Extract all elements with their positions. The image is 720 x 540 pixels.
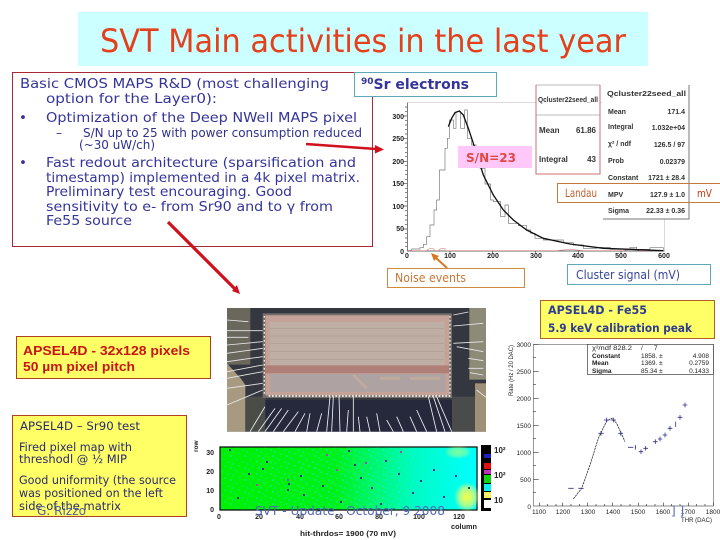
stats box: signal fit: 126.5 / 97 — [654, 142, 685, 149]
label: Landau — [558, 184, 720, 202]
stats box: noise: Qcluster22seed_all — [538, 97, 598, 104]
chart: Fe55 threshold scan: / — [641, 345, 643, 352]
chart: cluster signal histogram: 200 — [392, 159, 404, 166]
chart: Fe55 threshold scan: 0 — [527, 504, 531, 511]
chart: fired pixel map: 80 — [375, 514, 383, 521]
stats box: noise: 61.86 — [576, 126, 597, 135]
chart: fired pixel map: 100 — [413, 514, 425, 521]
panel: activities summary: • — [19, 110, 27, 126]
chart: cluster signal histogram: 100 — [392, 204, 404, 211]
panel: activities summary: Basic CMOS MAPS R&D (most challenging — [20, 76, 329, 92]
label: 90Sr electrons — [354, 72, 496, 96]
title banner — [78, 12, 648, 66]
label: APSEL4D pixels: 50 µm pixel pitch — [23, 359, 135, 374]
chart: Fe55 threshold scan: 500 — [520, 477, 531, 484]
chart: fired pixel map: 0 — [210, 507, 214, 514]
chart: Fe55 threshold scan: 1500 — [517, 423, 531, 430]
label: noise events — [388, 268, 524, 288]
chart: cluster signal histogram: 200 — [487, 253, 499, 260]
chart: cluster signal histogram: 300 — [530, 253, 542, 260]
chart: Fe55 threshold scan: Rate (Hz / 20 DAC) — [508, 345, 515, 396]
chart: Fe55 threshold scan: 4.908 — [693, 353, 709, 360]
panel: Sr90 test notes: APSEL4D – Sr90 test — [20, 419, 140, 433]
chart: cluster signal histogram: 400 — [572, 253, 584, 260]
arrow: summary to histogram — [306, 144, 384, 154]
panel: activities summary: Optimization of the Deep NWell MAPS pixel — [46, 110, 357, 126]
panel: activities summary — [12, 72, 372, 246]
label: cluster signal axis — [568, 264, 710, 284]
stats box: signal fit: Integral — [608, 124, 633, 131]
chart: fired pixel map: hit-thrdos= 1900 (70 mV) — [300, 531, 396, 538]
chart: cluster signal histogram: 500 — [615, 253, 627, 260]
chart: Fe55 threshold scan: 85.34 ± — [641, 368, 663, 375]
stats box: signal fit: 171.4 — [667, 109, 685, 116]
stats box: signal fit: Qcluster22seed_all — [607, 89, 686, 98]
chart: fired pixel map: 30 — [206, 450, 214, 457]
chart: Fe55 threshold scan: 3000 — [517, 342, 531, 349]
panel: Sr90 test notes: threshodl @ ½ MIP — [19, 452, 127, 466]
stats box: signal fit: χ² / ndf — [608, 141, 632, 148]
chart: fired pixel map: 0 — [217, 514, 221, 521]
panel: Sr90 test notes: Fired pixel map with — [19, 440, 132, 454]
stats box: noise — [536, 85, 600, 174]
label: 90Sr electrons: Sr electrons — [374, 77, 469, 93]
chart: Fe55 threshold scan: Mean — [592, 360, 609, 367]
chart: Fe55 threshold scan: Sigma — [592, 368, 612, 375]
photo: APSEL4D chip — [227, 308, 486, 432]
stats box: signal fit: 1721 ± 28.4 — [648, 175, 685, 182]
chart: Fe55 threshold scan: 1200 — [556, 509, 571, 516]
chart: Fe55 threshold scan: 1600 — [656, 509, 671, 516]
label: APSEL4D pixels — [16, 336, 210, 378]
chart: Fe55 threshold scan — [508, 342, 720, 524]
footer: talk title and date: SVT - Update , October, 9 2008 — [255, 503, 445, 518]
chart: Fe55 threshold scan: 1300 — [581, 509, 596, 516]
chart: Fe55 threshold scan: 0.2759 — [689, 360, 709, 367]
panel: activities summary: timestamp) implemented in a 4k pixel matrix. — [46, 170, 360, 186]
chart: cluster signal histogram: 50 — [396, 226, 404, 233]
chart: cluster signal histogram: 0 — [400, 249, 404, 256]
chart: Fe55 threshold scan: 1858. ± — [641, 353, 663, 360]
chart: cluster signal histogram: 600 — [658, 253, 670, 260]
panel: activities summary: S/N up to 25 with power consumption reduced — [83, 126, 362, 140]
label: S/N=23 — [458, 146, 532, 168]
label: Fe55 calibration: APSEL4D - Fe55 — [548, 303, 647, 317]
arrow: noise events pointer — [431, 253, 447, 268]
chart: Fe55 threshold scan: 0.1433 — [689, 368, 709, 375]
chart: Fe55 threshold scan: 1700 — [681, 509, 696, 516]
chart: fired pixel map: row — [193, 440, 200, 452]
arrow: summary to chip photo — [168, 222, 240, 294]
panel: activities summary: • — [19, 155, 27, 171]
label: S/N=23: S/N=23 — [466, 151, 516, 165]
chart: Fe55 threshold scan: THR (DAC) — [681, 517, 712, 524]
chart: cluster signal histogram: 0 — [405, 253, 409, 260]
chart: fired pixel map: 60 — [335, 514, 343, 521]
chart: fired pixel map — [193, 440, 480, 538]
color scale legend: 10² — [494, 446, 506, 455]
stats box: signal fit: MPV — [608, 192, 624, 199]
chart: Fe55 threshold scan: 1400 — [606, 509, 621, 516]
chart: fired pixel map: 10 — [206, 488, 214, 495]
chart: cluster signal histogram — [392, 103, 670, 260]
stats box: signal fit: 0.02379 — [660, 159, 685, 166]
stats box: signal fit: 22.33 ± 0.36 — [646, 208, 685, 215]
color scale legend: 10² — [494, 471, 506, 480]
panel: activities summary: (~30 uW/ch) — [79, 138, 155, 152]
panel: activities summary: Preliminary test encouraging. Good — [46, 184, 292, 200]
label: Fe55 calibration: 5.9 keV calibration peak — [548, 321, 692, 335]
stats box: signal fit: 1.032e+04 — [652, 125, 685, 132]
chart: Fe55 threshold scan: 2000 — [517, 396, 531, 403]
chart: Fe55 threshold scan: 1800 — [706, 509, 720, 516]
footer: author: G. Rizzo — [37, 504, 86, 518]
chart: Fe55 threshold scan: 7 — [654, 345, 658, 352]
panel: activities summary: – — [56, 126, 62, 140]
chart: fired pixel map: column — [451, 524, 477, 531]
chart: Fe55 threshold scan: 1000 — [517, 450, 531, 457]
stats box: signal fit: Prob — [608, 158, 624, 165]
stats box: noise: Integral — [539, 155, 568, 164]
chart: fired pixel map: 20 — [206, 469, 214, 476]
chart: Fe55 threshold scan: 1369. ± — [641, 360, 663, 367]
label: 90Sr electrons: 90 — [361, 77, 374, 87]
chart: fired pixel map: 40 — [296, 514, 304, 521]
chart: Fe55 threshold scan: 1500 — [631, 509, 646, 516]
stats box: signal fit: Mean — [608, 109, 626, 116]
chart: fired pixel map: 20 — [255, 514, 263, 521]
chart: Fe55 threshold scan: Constant — [592, 353, 621, 360]
panel: activities summary: Fe55 source — [46, 213, 132, 229]
panel: Sr90 test notes: Good uniformity (the source — [19, 473, 176, 487]
title banner: SVT Main activities in the last year — [100, 22, 627, 60]
stats box: signal fit: Sigma — [608, 208, 629, 215]
panel: Sr90 test notes: side of the matrix — [19, 499, 121, 513]
stats box: signal fit: 127.9 ± 1.0 — [650, 192, 685, 199]
stats box: signal fit — [602, 85, 689, 219]
color scale legend — [481, 445, 506, 511]
panel: activities summary: sensitivity to e- from Sr90 and to γ from — [46, 199, 333, 215]
chart: cluster signal histogram: 100 — [444, 253, 456, 260]
color scale legend: 10 — [494, 496, 503, 505]
chart: Fe55 threshold scan: 1100 — [532, 509, 546, 516]
label: APSEL4D pixels: APSEL4D - 32x128 pixels — [23, 343, 190, 358]
label: Landau: mV — [697, 187, 712, 200]
stats box: noise: Mean — [539, 126, 560, 135]
chart: Fe55 threshold scan: χ²/ndf 828.2 — [592, 345, 632, 352]
chart: cluster signal histogram: 250 — [392, 136, 404, 143]
label: noise events: Noise events — [395, 271, 466, 285]
label: cluster signal axis: Cluster signal (mV) — [576, 268, 680, 282]
panel: activities summary: Fast redout architecture (sparsification and — [46, 155, 356, 171]
label: Fe55 calibration — [540, 300, 714, 338]
panel: activities summary: option for the Layer0): — [46, 91, 217, 107]
chart: cluster signal histogram: 300 — [392, 114, 404, 121]
stats box: signal fit: Constant — [608, 175, 639, 182]
footer: slide number: ] ] — [671, 504, 684, 518]
label: Landau: Landau — [565, 186, 597, 200]
chart: cluster signal histogram: 150 — [392, 181, 404, 188]
stats box: noise: 43 — [587, 155, 597, 164]
panel: Sr90 test notes: was positioned on the left — [19, 486, 163, 500]
chart: Fe55 threshold scan: 2500 — [517, 369, 531, 376]
chart: fired pixel map: 120 — [453, 514, 465, 521]
panel: Sr90 test notes — [12, 416, 186, 516]
